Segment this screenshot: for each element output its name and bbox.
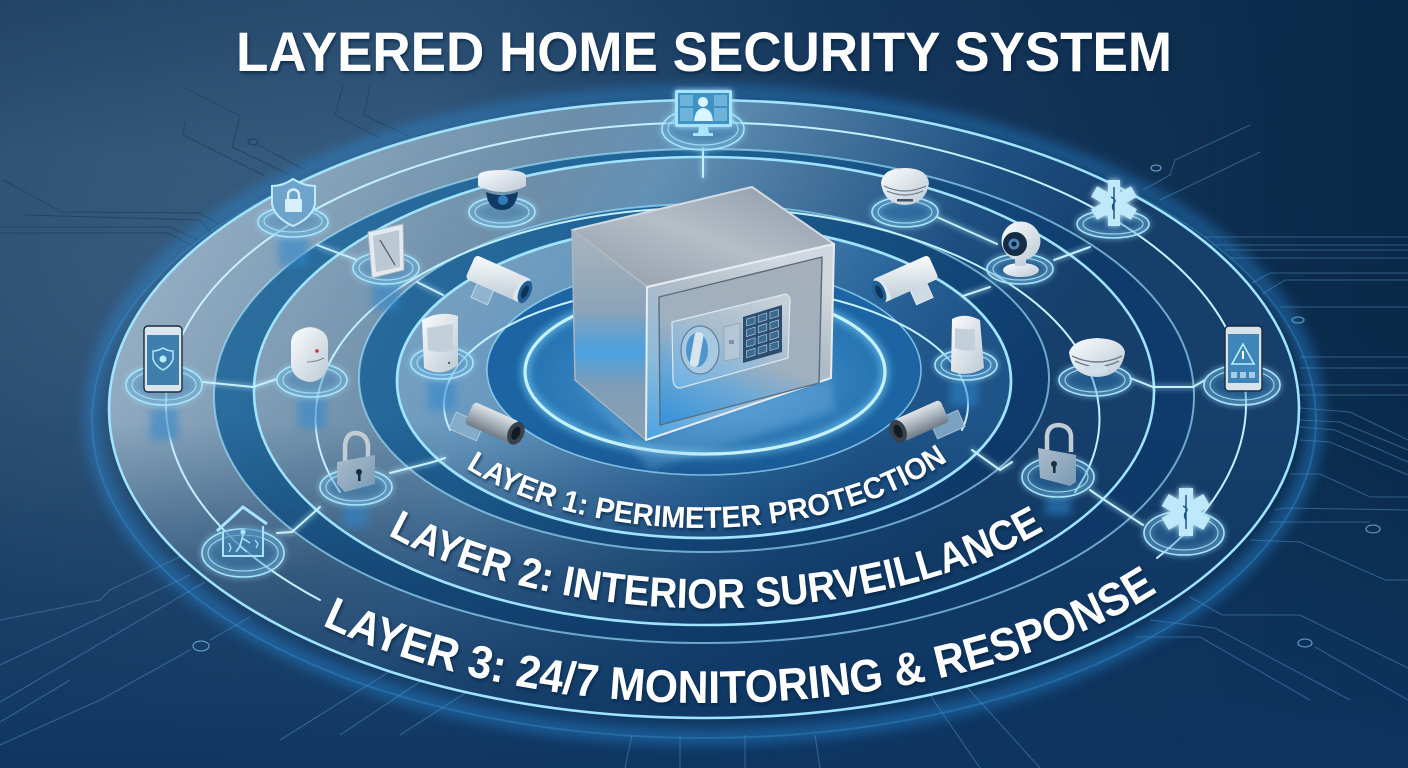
dial: [681, 326, 719, 374]
icon: smoke detector: [1069, 338, 1125, 377]
panel: inner gap: [487, 265, 921, 475]
icon: house with intruder: [217, 507, 267, 556]
node ring: [411, 347, 473, 379]
node ring: [872, 197, 938, 227]
panel: gap between layers 2 and 1: [359, 204, 1049, 552]
outer glow: [92, 93, 1316, 737]
icon: motion sensor: [951, 316, 984, 374]
top face: [572, 187, 834, 287]
icon: motion sensor: [422, 314, 458, 372]
device: left padlock: [320, 433, 392, 505]
node ring: [258, 207, 328, 237]
icon: phone with alert: [1225, 326, 1262, 391]
reflections under devices: [150, 236, 1071, 527]
device: right padlock: [1022, 425, 1094, 497]
icon: motion detector: [291, 327, 328, 382]
device: house alert: [202, 507, 284, 577]
reflection: [575, 378, 835, 470]
node ring: [1059, 364, 1131, 396]
panel: layer 3 band: [109, 100, 1299, 718]
concentric rings platform: [92, 93, 1316, 738]
device: right phone: [1204, 326, 1280, 405]
device: medical star upper right: [1077, 180, 1149, 238]
device: left phone: [126, 326, 202, 405]
label: layer 1: LAYER 1: PERIMETER PROTECTION: [467, 444, 948, 532]
keypad: [743, 305, 782, 363]
left face: [572, 230, 647, 440]
mid lines: [166, 122, 1246, 600]
icon: padlock: [1038, 425, 1076, 486]
node ring: [469, 197, 535, 227]
door: [659, 257, 822, 425]
node ring: [662, 108, 744, 150]
icon: webcam: [1002, 222, 1040, 277]
device: shield: [258, 179, 328, 237]
front face: [646, 244, 834, 440]
node ring: [1204, 365, 1280, 405]
node ring: [987, 254, 1053, 284]
small plate: [724, 323, 740, 361]
node ring: [1022, 457, 1094, 497]
device: lower right medical star: [1144, 488, 1224, 555]
camera: upper left: [459, 255, 536, 319]
device: top monitor: [662, 90, 744, 150]
node ring: [935, 350, 997, 380]
dial plate: [672, 294, 790, 388]
icon: smoke detector: [881, 168, 929, 205]
device: right inner PIR: [935, 316, 997, 380]
node ring: [202, 529, 284, 577]
title: LAYERED HOME SECURITY SYSTEM: [236, 20, 1172, 83]
node ring: [353, 252, 419, 284]
device: webcam: [987, 222, 1053, 284]
icon: dome camera: [478, 170, 526, 210]
node ring: [320, 469, 392, 505]
panel: layer 2 band: [254, 157, 1154, 625]
device: top smoke detector: [872, 168, 938, 227]
icon: star of life: [1091, 180, 1137, 226]
device: dome camera: [469, 170, 535, 227]
panel: central disc: [525, 290, 885, 454]
device: round motion sensor: [277, 327, 347, 397]
node ring: [277, 363, 347, 397]
icon: door sensor panel: [368, 224, 404, 278]
label: layer 2: LAYER 2: INTERIOR SURVEILLANCE: [390, 506, 1044, 612]
device: right smoke detector: [1059, 338, 1131, 396]
icon: phone with shield: [144, 326, 182, 392]
node ring: [126, 365, 202, 405]
node ring: [1077, 210, 1149, 238]
icon: star of life: [1162, 488, 1210, 536]
camera: upper right: [868, 255, 945, 319]
device: door sensor: [353, 224, 419, 284]
camera: lower left: [449, 397, 528, 458]
icon: padlock: [337, 433, 375, 492]
icon: monitor with feeds: [675, 90, 732, 136]
camera: lower right: [886, 395, 965, 456]
icon: shield with padlock: [272, 179, 315, 226]
connectors: [203, 148, 1205, 533]
node ring: [1144, 511, 1224, 555]
label: layer 3: LAYER 3: 24/7 MONITORING & RESPONSE: [324, 566, 1158, 706]
safe: [572, 187, 835, 470]
lower shading: [109, 100, 1299, 718]
panel: layer 1 band: [397, 224, 1011, 538]
panel: gap between layers 3 and 2: [214, 149, 1194, 643]
device: left inner PIR: [411, 314, 473, 379]
